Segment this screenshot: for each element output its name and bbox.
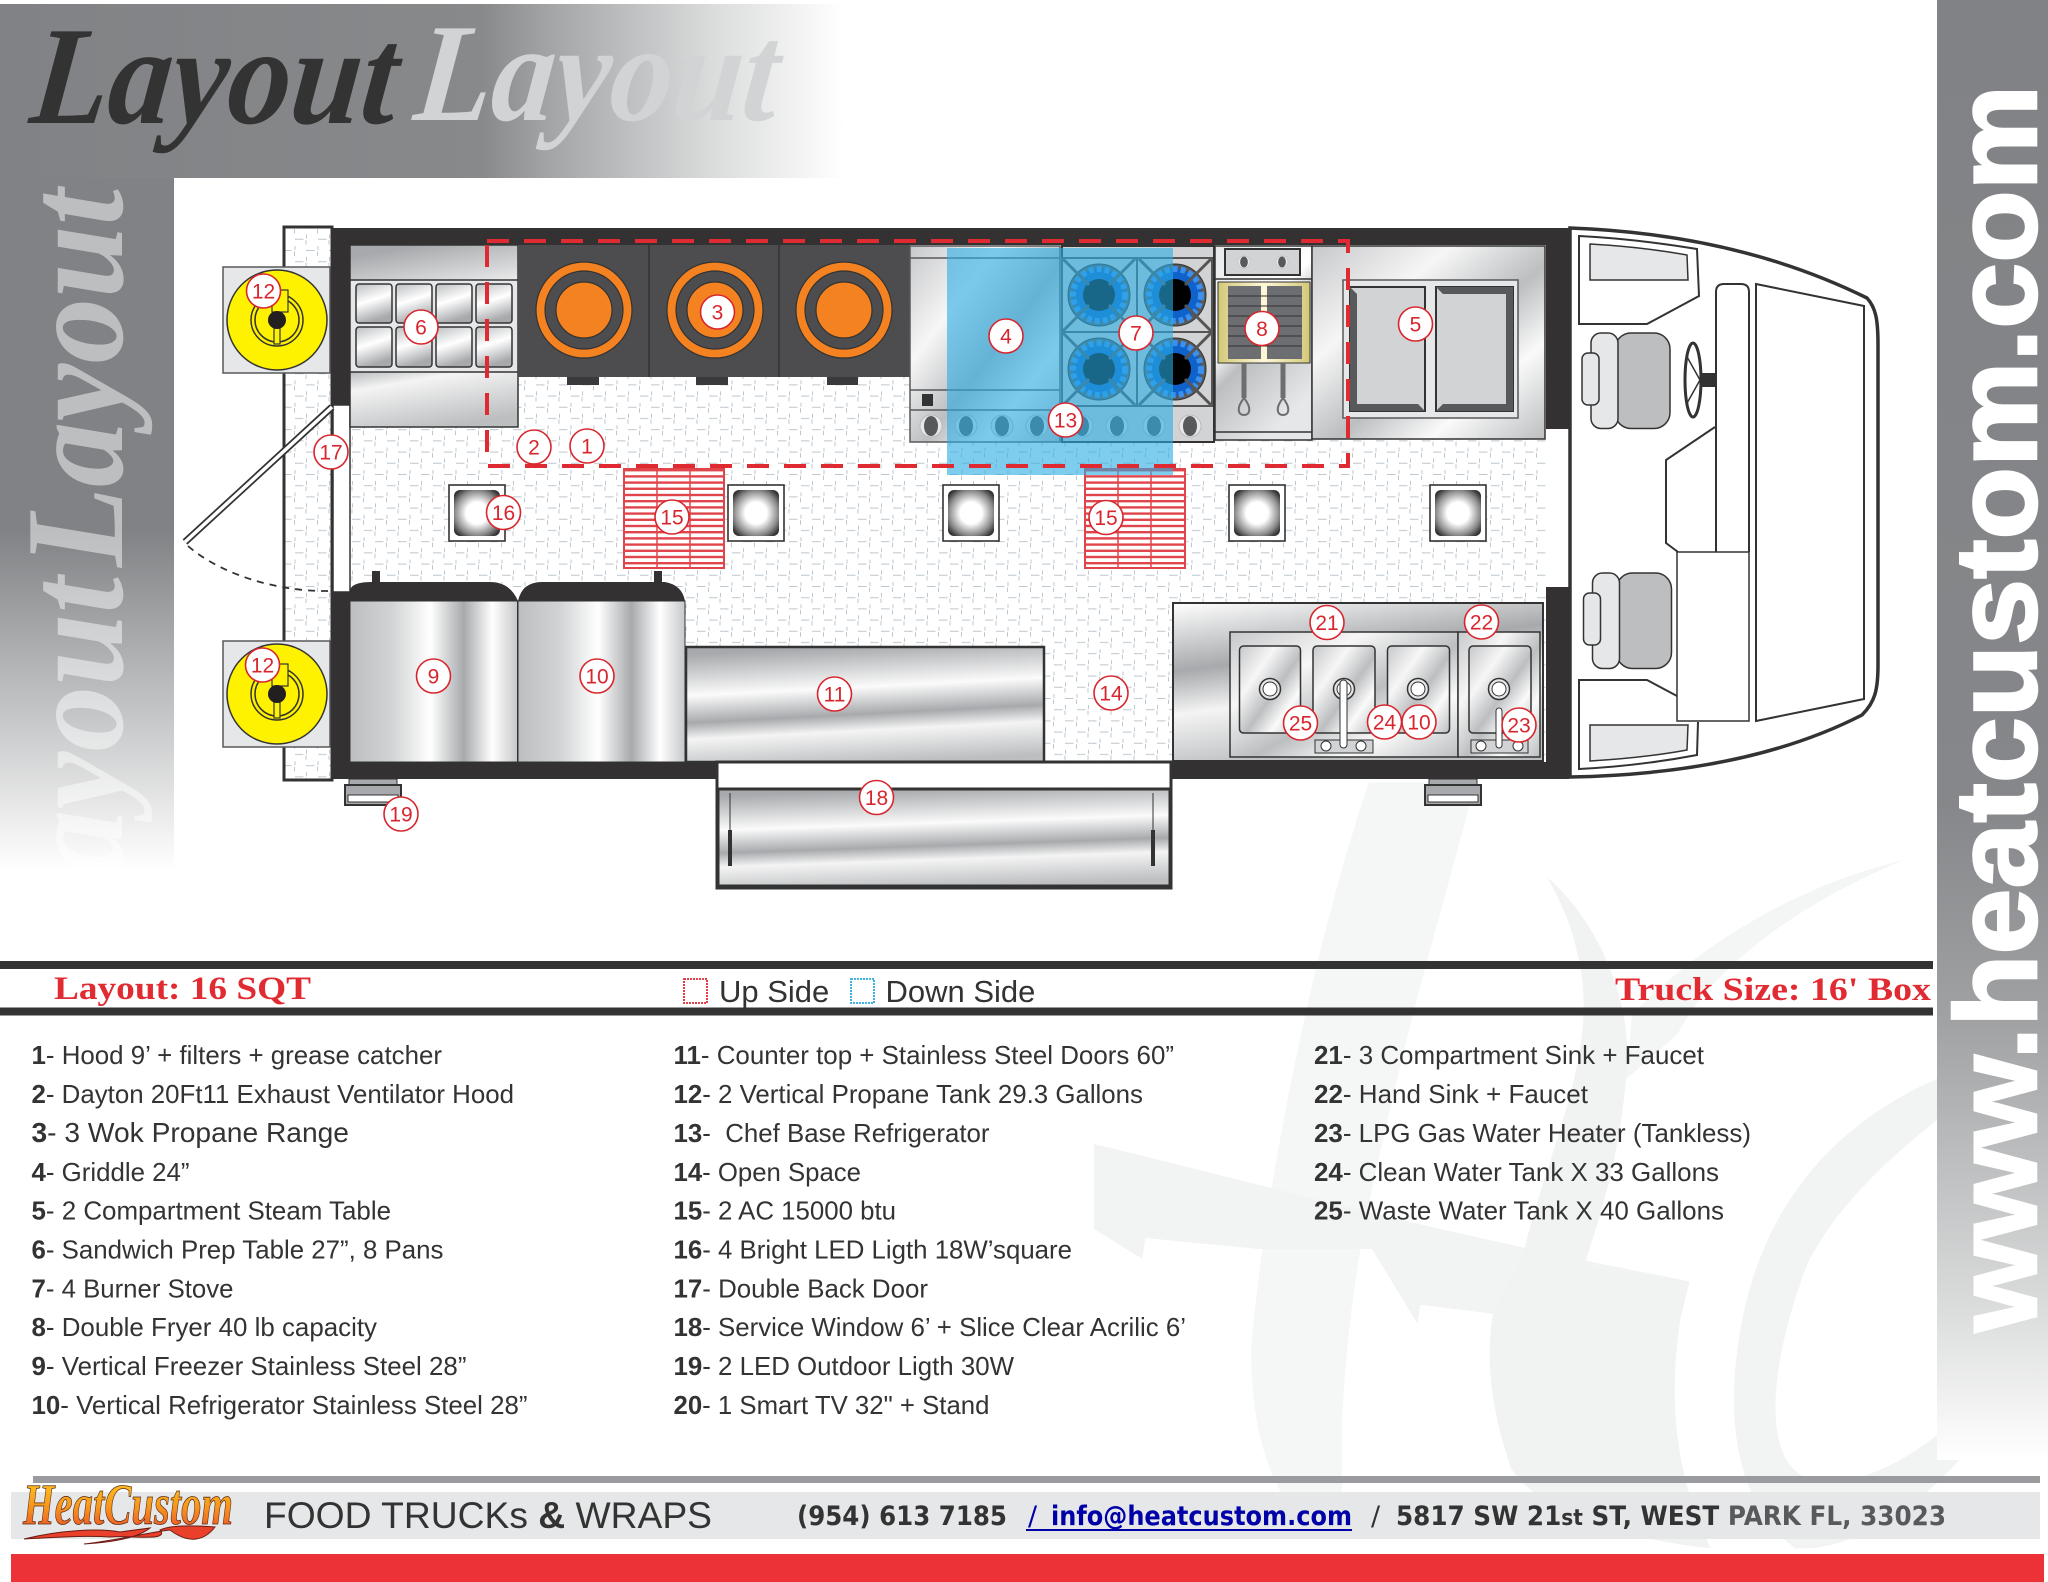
rear platform — [284, 227, 332, 780]
marker 25 — [1284, 706, 1318, 740]
marker 22 — [1464, 605, 1498, 639]
marker 17: 17 — [319, 442, 343, 464]
equipment list column 2 — [674, 1040, 1186, 1420]
header band — [0, 0, 844, 178]
equipment list column 1: 10- Vertical Refrigerator Stainless Steel 28” — [32, 1390, 528, 1420]
blue down side overlay — [947, 248, 1173, 475]
marker 2 — [517, 430, 551, 464]
vertical Layout text lower: Layout — [0, 573, 153, 957]
marker 15 left — [655, 500, 689, 534]
equipment list column 2: 19- 2 LED Outdoor Ligth 30W — [674, 1351, 1014, 1381]
marker 15 right — [1089, 500, 1123, 534]
equipment list column 1: 8- Double Fryer 40 lb capacity — [32, 1312, 377, 1342]
cab — [1570, 228, 1878, 777]
equipment list column 2: 15- 2 AC 15000 btu — [674, 1196, 896, 1226]
marker 12 top — [246, 274, 280, 308]
equipment list column 2: 11- Counter top + Stainless Steel Doors 60” — [674, 1040, 1174, 1070]
marker 10 fridge — [580, 659, 614, 693]
marker 16: 16 — [492, 502, 515, 525]
console — [1677, 552, 1749, 721]
title: light Layout: Layout — [407, 0, 791, 151]
marker 9 — [416, 659, 450, 693]
marker 18: 18 — [865, 787, 888, 810]
truck floor plan — [185, 227, 1878, 888]
marker 2: 2 — [528, 436, 540, 460]
email: / — [1028, 1501, 1038, 1532]
vertical Layout text upper: Layout — [0, 185, 153, 569]
marker 6 — [404, 310, 438, 344]
kitchen floor — [350, 245, 1546, 763]
equipment list column 1: 7- 4 Burner Stove — [32, 1274, 234, 1304]
equipment list column 2: 16- 4 Bright LED Ligth 18W’square — [674, 1234, 1072, 1264]
propane tank bottom — [223, 641, 330, 747]
marker 15 right: 15 — [1094, 507, 1118, 530]
propane tank top — [223, 267, 330, 373]
marker 19 — [384, 797, 418, 831]
marker 12 bottom: 12 — [251, 654, 274, 678]
title: dark Layout: Layout — [23, 0, 410, 154]
marker 10 sink: 10 — [1407, 712, 1431, 734]
marker 12 bottom — [246, 648, 280, 682]
marker 7 — [1119, 316, 1153, 350]
marker 10 fridge: 10 — [585, 666, 609, 688]
equipment list column 3: 22- Hand Sink + Faucet — [1314, 1079, 1589, 1109]
phone: (954) 613 7185 — [797, 1501, 1007, 1532]
equipment list column 3: 23- LPG Gas Water Heater (Tankless) — [1314, 1118, 1751, 1148]
back door — [185, 407, 332, 591]
steam table — [1312, 246, 1545, 439]
marker 5: 5 — [1410, 314, 1421, 336]
equipment list column 3: 25- Waste Water Tank X 40 Gallons — [1314, 1196, 1724, 1226]
marker 7: 7 — [1130, 322, 1142, 346]
refrigerator — [518, 571, 685, 762]
marker 8: 8 — [1256, 318, 1268, 341]
counter top — [686, 647, 1044, 762]
marker 24 — [1368, 705, 1402, 739]
equipment list column 2: 14- Open Space — [674, 1157, 861, 1187]
outdoor lights — [345, 779, 1481, 805]
windshield — [1756, 284, 1864, 721]
equipment list column 1: 3- 3 Wok Propane Range — [32, 1117, 349, 1148]
double fryer — [1215, 246, 1312, 440]
marker 10 sink — [1402, 705, 1436, 739]
sandwich prep table — [350, 245, 518, 427]
freezer — [350, 571, 518, 762]
equipment list column 2: 18- Service Window 6’ + Slice Clear Acrilic 6’ — [674, 1312, 1186, 1342]
marker 21 — [1310, 606, 1344, 640]
equipment list column 2: 20- 1 Smart TV 32" + Stand — [674, 1390, 990, 1420]
equipment list column 1 — [32, 1040, 528, 1420]
equipment list column 1: 9- Vertical Freezer Stainless Steel 28” — [32, 1351, 466, 1381]
equipment list column 2: 17- Double Back Door — [674, 1274, 928, 1304]
marker 4: 4 — [1000, 326, 1012, 348]
sink counter — [1173, 603, 1543, 761]
marker 9: 9 — [428, 666, 439, 688]
marker 15 left: 15 — [660, 506, 684, 530]
marker 22: 22 — [1470, 612, 1493, 634]
footer — [11, 1472, 2044, 1582]
griddle and stove knobs — [920, 415, 1201, 437]
equipment list column 2: 13- Chef Base Refrigerator — [674, 1118, 990, 1148]
marker 3: 3 — [712, 302, 723, 324]
equipment list column 3: 21- 3 Compartment Sink + Faucet — [1314, 1040, 1705, 1070]
marker 1 — [570, 429, 604, 463]
marker 8 — [1245, 312, 1279, 346]
marker 11: 11 — [824, 684, 845, 706]
legend — [684, 974, 1035, 1009]
logo: HeatCustom: HeatCustom — [22, 1472, 233, 1537]
legend: Down Side — [886, 974, 1035, 1009]
driver seat — [1582, 333, 1670, 428]
watermark: H logo — [1094, 783, 2043, 1548]
equipment list column 1: 4- Griddle 24” — [32, 1157, 190, 1187]
specification bar — [0, 961, 1933, 1016]
steering wheel — [1685, 343, 1716, 417]
marker 25: 25 — [1289, 712, 1312, 736]
marker 16 — [486, 496, 520, 530]
equipment list column 1: 5- 2 Compartment Steam Table — [32, 1196, 391, 1226]
number markers — [246, 274, 1536, 831]
red up side hood outline — [487, 241, 1348, 466]
marker 12 top: 12 — [252, 280, 275, 304]
address: 5817 SW 21st ST, WEST PARK FL, 33023 — [1396, 1501, 1946, 1532]
equipment list column 3: 24- Clean Water Tank X 33 Gallons — [1314, 1157, 1719, 1187]
equipment list column 1: 2- Dayton 20Ft11 Exhaust Ventilator Hood — [32, 1079, 514, 1109]
equipment list column 1: 1- Hood 9’ + filters + grease catcher — [32, 1040, 442, 1070]
AC unit right — [1085, 469, 1185, 568]
truck size heading: Truck Size: 16' Box — [1615, 972, 1932, 1008]
email: info@heatcustom.com — [1051, 1501, 1352, 1532]
marker 13 — [1048, 403, 1082, 437]
marker 4 — [989, 319, 1023, 353]
layout size heading: Layout: 16 SQT — [54, 971, 311, 1007]
marker 17 — [314, 435, 348, 469]
legend: Up Side — [719, 974, 829, 1009]
marker 23 — [1502, 708, 1536, 742]
marker 19: 19 — [389, 804, 413, 826]
logo: HeatCustom — [22, 1472, 233, 1544]
left column band — [0, 178, 174, 978]
marker 18 — [860, 780, 894, 814]
marker 6: 6 — [415, 316, 427, 340]
marker 3 — [700, 295, 734, 329]
address: / — [1371, 1501, 1381, 1532]
marker 14: 14 — [1099, 682, 1123, 706]
dash — [1716, 284, 1749, 552]
marker 1: 1 — [581, 436, 593, 458]
griddle — [910, 246, 1060, 442]
marker 14 — [1094, 676, 1128, 710]
burner stove — [1062, 246, 1214, 442]
tagline: FOOD TRUCKs & WRAPS — [264, 1495, 712, 1536]
equipment list column 1: 6- Sandwich Prep Table 27”, 8 Pans — [32, 1234, 444, 1264]
marker 23: 23 — [1507, 714, 1531, 738]
passenger seat — [1584, 573, 1672, 668]
marker 24: 24 — [1373, 712, 1396, 734]
rear door strip — [333, 405, 350, 592]
equipment list column 3 — [1314, 1040, 1751, 1226]
led lights — [449, 485, 1486, 541]
wok range — [518, 245, 910, 385]
truck walls — [332, 228, 1569, 779]
service window — [717, 762, 1171, 888]
AC unit left — [624, 469, 724, 568]
marker 21: 21 — [1315, 612, 1339, 635]
marker 5 — [1398, 307, 1432, 341]
marker 11 — [818, 677, 852, 711]
marker 13: 13 — [1054, 410, 1077, 432]
equipment list column 2: 12- 2 Vertical Propane Tank 29.3 Gallons — [674, 1079, 1143, 1109]
